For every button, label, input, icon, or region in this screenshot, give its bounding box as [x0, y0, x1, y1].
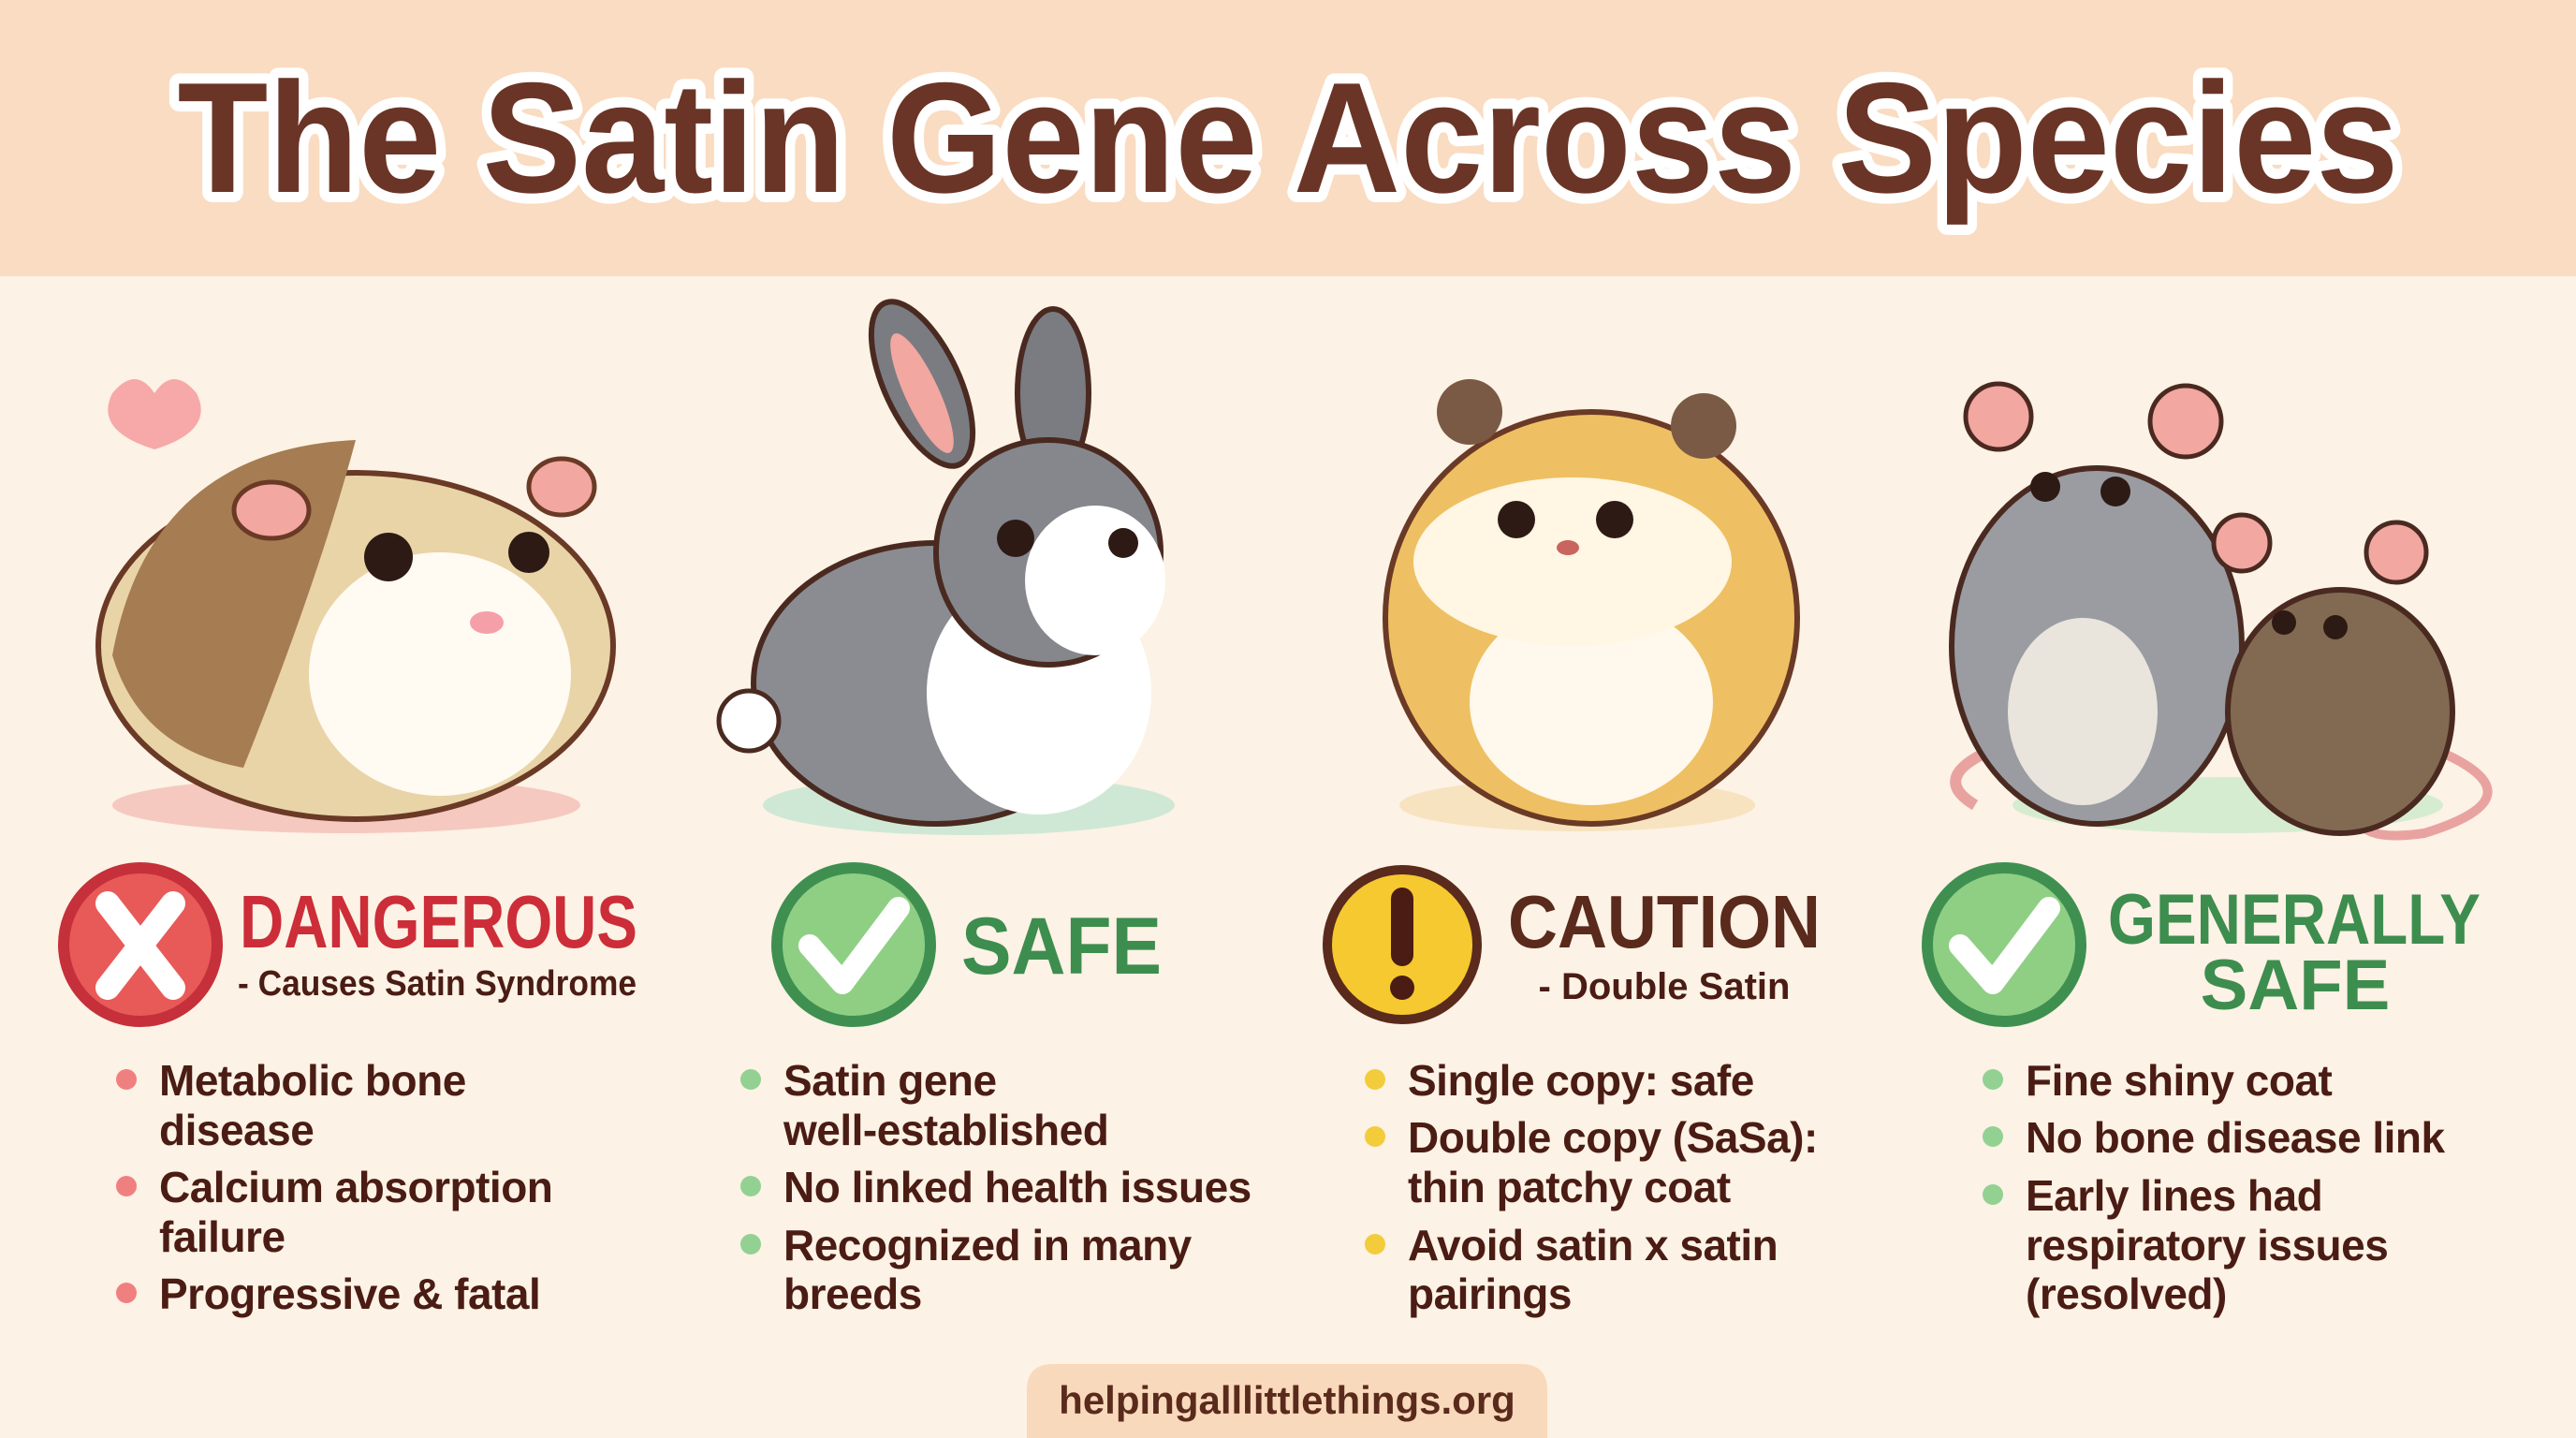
bullets: rats: [1983, 1056, 2445, 1318]
bullets: rabbit: Recognized in many: [783, 1221, 1193, 1269]
bullets: hamster: Avoid satin x satin: [1408, 1221, 1778, 1269]
animal: hamster: [1385, 379, 1797, 831]
title: The Satin Gene Across Species: [178, 50, 2398, 226]
icon: red X: [64, 868, 217, 1021]
footer url pill: helpingalllittlethings.org: [1059, 1378, 1515, 1422]
animal: rabbit: [719, 287, 1175, 835]
bullets: hamster: [1365, 1056, 1818, 1318]
icon: caution: [1327, 870, 1477, 1020]
bullets: hamster: thin patchy coat: [1408, 1163, 1731, 1211]
bullets: guinea pig: [116, 1056, 552, 1318]
bullets: guinea pig: Metabolic bone: [159, 1056, 466, 1105]
bullets: guinea pig: Progressive & fatal: [159, 1269, 540, 1318]
bullets: rabbit: breeds: [783, 1269, 922, 1318]
bullets: rabbit: Satin gene: [783, 1056, 997, 1105]
status: dangerous: DANGEROUS: [240, 880, 637, 963]
status: dangerous: [238, 880, 637, 1004]
status: caution: CAUTION: [1508, 880, 1821, 963]
footer url pill: [1027, 1364, 1547, 1438]
bullets: rabbit: No linked health issues: [783, 1163, 1251, 1211]
status: generally safe: GENERALLY: [2108, 880, 2481, 960]
bullets: guinea pig: disease: [159, 1106, 314, 1154]
status: generally safe: [2108, 880, 2481, 1025]
icon: green check 1: [777, 868, 930, 1021]
status: dangerous: - Causes Satin Syndrome: [238, 964, 637, 1004]
bullets: hamster: Double copy (SaSa):: [1408, 1113, 1818, 1162]
animal: rats: [1952, 384, 2488, 835]
bullets: rats: respiratory issues: [2026, 1221, 2388, 1269]
bullets: hamster: Single copy: safe: [1408, 1056, 1754, 1105]
bullets: rats: (resolved): [2026, 1269, 2227, 1318]
status: caution: - Double Satin: [1539, 966, 1790, 1007]
bullets: rabbit: well-established: [783, 1106, 1108, 1154]
bullets: rats: No bone disease link: [2026, 1113, 2445, 1162]
bullets: rats: Fine shiny coat: [2026, 1056, 2333, 1105]
bullets: rabbit: [740, 1056, 1251, 1318]
status: safe: SAFE: [961, 902, 1162, 991]
status: generally safe: SAFE: [2201, 946, 2390, 1025]
bullets: guinea pig: Calcium absorption: [159, 1163, 552, 1211]
bullets: guinea pig: failure: [159, 1212, 285, 1261]
header band: [0, 0, 2576, 276]
bullets: hamster: pairings: [1408, 1269, 1572, 1318]
bullets: rats: Early lines had: [2026, 1171, 2322, 1220]
status: caution: [1508, 880, 1821, 1007]
icon: green check 2: [1927, 868, 2081, 1021]
animal: guinea pig: [98, 379, 613, 833]
